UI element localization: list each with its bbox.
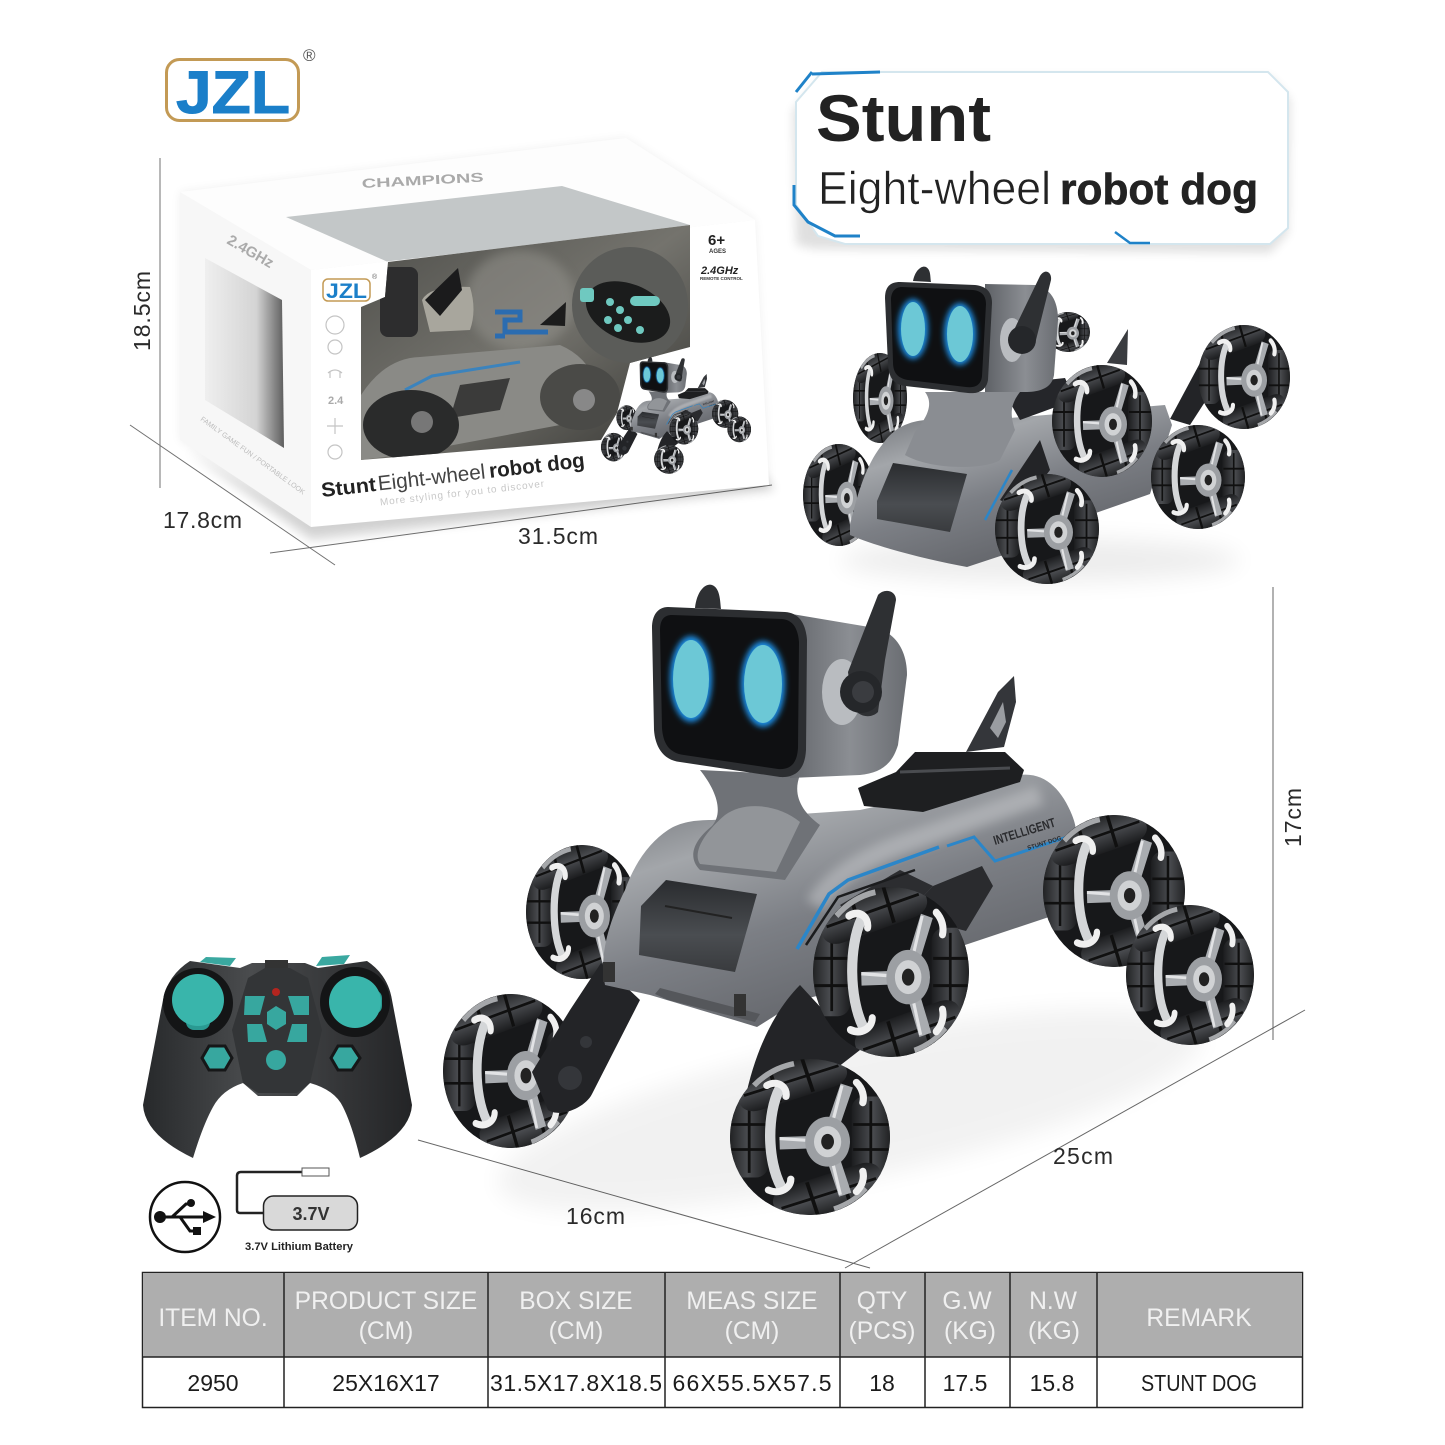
main robot dimension labels: 17cm bbox=[1280, 788, 1306, 847]
table header: (KG) bbox=[1028, 1318, 1080, 1345]
table header: N.W bbox=[1029, 1288, 1078, 1315]
box front title bbox=[320, 449, 587, 515]
table header: BOX SIZE bbox=[519, 1288, 633, 1315]
logo: JZL: ® bbox=[303, 46, 316, 65]
title panel bbox=[793, 72, 1290, 253]
specification table bbox=[142, 1272, 1303, 1408]
table header: (KG) bbox=[944, 1318, 996, 1345]
main robot dimension labels bbox=[566, 788, 1306, 1229]
product box bbox=[180, 138, 775, 540]
age and remote label: 2.4GHz bbox=[700, 265, 739, 277]
button panel bbox=[202, 968, 360, 1093]
table header bbox=[158, 1288, 1252, 1345]
box dimension lines bbox=[130, 158, 772, 565]
table header: (CM) bbox=[359, 1318, 413, 1345]
table values: 66X55.5X57.5 bbox=[672, 1370, 832, 1396]
table header: REMARK bbox=[1146, 1305, 1252, 1332]
mini logo: ® bbox=[372, 273, 378, 281]
box left face: FAMILY GAME FUN / PORTABLE LOOK bbox=[199, 416, 306, 497]
age and remote label: 6+ bbox=[708, 232, 725, 249]
box dimension labels bbox=[129, 271, 598, 549]
age and remote label: REMOTE CONTROL bbox=[700, 276, 743, 281]
box dimension labels: 18.5cm bbox=[129, 271, 155, 351]
table values: 18 bbox=[869, 1370, 895, 1396]
logo: JZL: JZL bbox=[176, 59, 290, 126]
packed robot in window bbox=[361, 250, 620, 460]
main robot dimension labels: 16cm bbox=[566, 1203, 625, 1229]
box top face bbox=[180, 138, 755, 270]
box left face: 2.4GHz bbox=[224, 232, 277, 272]
box front title: robot dog bbox=[488, 449, 586, 483]
table values: 31.5X17.8X18.5 bbox=[490, 1370, 662, 1396]
table values: STUNT DOG bbox=[1141, 1370, 1257, 1396]
box front title: Stunt bbox=[320, 474, 378, 502]
battery with cable: 3.7V bbox=[292, 1204, 330, 1224]
remote controller bbox=[143, 955, 412, 1158]
box dimension labels: 17.8cm bbox=[163, 507, 242, 533]
title panel: Stunt bbox=[816, 81, 991, 155]
table header: MEAS SIZE bbox=[686, 1288, 818, 1315]
logo: JZL bbox=[166, 46, 316, 126]
table header: (CM) bbox=[549, 1318, 603, 1345]
table header: G.W bbox=[942, 1288, 992, 1315]
title panel: Eight-wheel bbox=[818, 162, 1051, 214]
age and remote label: AGES bbox=[709, 249, 726, 255]
main robot bbox=[440, 585, 1257, 1253]
joysticks bbox=[163, 967, 390, 1038]
table header: ITEM NO. bbox=[158, 1305, 268, 1332]
feature icons: 2.4 bbox=[328, 395, 344, 407]
icon: USB bbox=[150, 1182, 220, 1252]
battery with cable bbox=[237, 1168, 358, 1253]
mini logo bbox=[323, 273, 378, 303]
box left face bbox=[180, 192, 311, 527]
main robot dimension lines bbox=[418, 587, 1305, 1268]
box dimension labels: 31.5cm bbox=[518, 523, 598, 549]
table values: 17.5 bbox=[943, 1370, 987, 1396]
mini robot on box bbox=[600, 357, 752, 477]
box front title: More styling for you to discover bbox=[379, 479, 545, 508]
title panel: robot dog bbox=[1060, 165, 1258, 214]
table values: 2950 bbox=[187, 1370, 239, 1396]
mini logo: JZL bbox=[326, 280, 367, 303]
top-right robot bbox=[802, 267, 1292, 595]
table header: PRODUCT SIZE bbox=[295, 1288, 477, 1315]
table header: QTY bbox=[857, 1288, 907, 1315]
feature icons bbox=[326, 316, 344, 459]
table header: (CM) bbox=[725, 1318, 779, 1345]
table values: 25X16X17 bbox=[332, 1370, 440, 1396]
table values: 15.8 bbox=[1030, 1370, 1074, 1396]
packed controller in window bbox=[572, 247, 688, 363]
main robot dimension labels: 25cm bbox=[1053, 1143, 1113, 1169]
box front face bbox=[311, 220, 769, 527]
box front title: Eight-wheel bbox=[377, 460, 487, 496]
box top face: CHAMPIONS bbox=[361, 170, 484, 191]
table header: (PCS) bbox=[849, 1318, 915, 1345]
battery with cable: 3.7V Lithium Battery bbox=[245, 1241, 354, 1253]
table values bbox=[187, 1370, 1257, 1396]
age and remote label bbox=[700, 232, 743, 281]
